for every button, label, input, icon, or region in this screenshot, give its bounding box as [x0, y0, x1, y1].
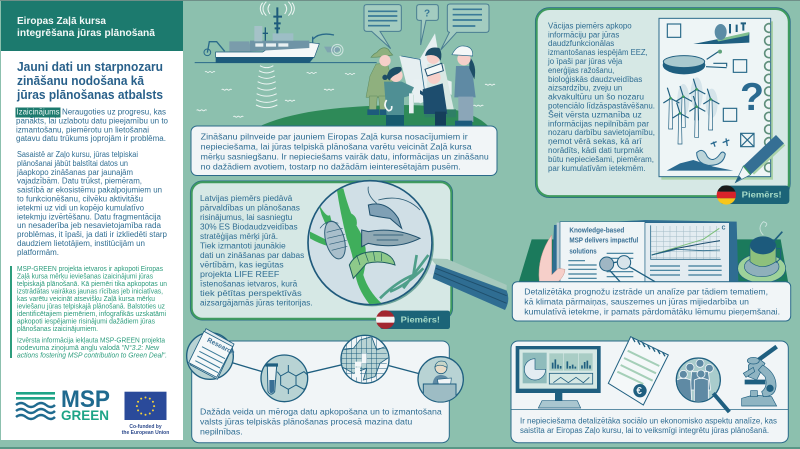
text block: project note: ieviešanu jūras telpiskajā plānošanā. Balstoties uz: [17, 303, 165, 310]
icon: test tube and molecule: [261, 355, 309, 402]
shrimp: [368, 187, 420, 228]
text block: Latvia: [200, 194, 313, 308]
text box: knowledge improvement: nepieciešama, lai jūras telpiskā plānošana varētu veicināt Zaļā kursa: [201, 142, 472, 152]
icon: microscope: [742, 347, 777, 406]
fish: [362, 230, 420, 247]
icon: glasses: [600, 256, 655, 282]
speech bubbles: [364, 4, 489, 50]
text block: Latvia: vērtībām, kas iegūtas: [200, 261, 284, 270]
isopod: [320, 220, 348, 260]
panel: Latvia example: [190, 181, 508, 330]
text box: knowledge improvement: Zināšanu pilnveide par jauniem Eiropas Zaļā kursa nosacījumiem ir: [201, 132, 468, 142]
people with map: [366, 33, 476, 126]
text block: challenge: gatavu datu trūkums joprojām ir problēma.: [16, 134, 166, 143]
badge: Germany example: [716, 185, 789, 205]
text block: project note: identificētajiem piemēriem, infografikās uzskatāmi: [17, 311, 166, 318]
panel: left sidebar: [1, 1, 183, 440]
text block: socio-economic: [520, 416, 777, 435]
icon: hand holding book: [539, 235, 565, 282]
text block: project note: kas varētu veicināt atsevišķu Zaļā kursa mērķu: [17, 296, 155, 303]
text block: Germany: Šeit vērsta uzmanība uz: [548, 110, 642, 119]
text box: forecasting: Detalizētāka prognožu izstrāde un analīze par tādiem tematiem,: [524, 286, 768, 296]
text block: Germany: par kumulatīvām ietekmēm.: [548, 164, 646, 173]
text block: Latvia: Tiek izmantoti jaunākie: [200, 242, 286, 251]
icon: pencil: [735, 135, 785, 183]
text block: challenge: panākts, lai uzlabotu datu pieejamību un to: [16, 116, 169, 125]
illustration: open report on desk: [518, 220, 788, 283]
person: teal jacket: [382, 67, 420, 126]
icon: dashboard monitor: [516, 346, 601, 408]
icon: research paper: Research: [206, 337, 236, 357]
text block: project note: [10, 266, 167, 360]
icon: coast and industry: [693, 23, 749, 44]
heading: [16, 59, 163, 102]
illustration: analysis icons: [516, 337, 777, 412]
text block: green deal data gaps: problēmas, it īpaši, ja dati ir izkliedēti starp: [17, 230, 168, 239]
text block: Germany: akvakultūru un šo nozaru: [548, 93, 644, 102]
header banner: [1, 1, 183, 51]
text block: project note: MSP-GREEN projekta ietvaros ir apkopoti Eiropas: [17, 266, 163, 273]
text block: project note: actions fostering MSP contribution to Green Deal".: [17, 353, 167, 360]
badge: Germany example: Piemērs!: [742, 190, 782, 200]
badge: Latvia example: [375, 310, 450, 330]
text block: green deal data gaps: jāapkopo zināšanas par jaunajām: [16, 168, 133, 177]
book: [552, 220, 738, 283]
text box: knowledge improvement: [191, 126, 497, 176]
research ship: [204, 7, 343, 63]
text box: forecasting: kā klimata pārmaiņas, sauszemes un jūras mijiedarbība un: [524, 296, 749, 306]
text block: green deal data gaps: to funkcionēšanu, cilvēku aktivitāšu: [17, 194, 143, 204]
text block: Germany: norādīts, kādi dati turpmāk: [548, 146, 643, 155]
text box: knowledge improvement: mērķu sasniegšanu. Ir nepieciešams vairāk datu, informācijas un zināšanu: [201, 152, 489, 162]
text block: Germany: [547, 21, 655, 173]
icon: notebook with euro: [608, 337, 668, 405]
text block: project note: Zaļā kursa mērķu ieviešanas izaicinājumi jūras: [17, 273, 153, 280]
text block: green deal data gaps: Sasaistē ar Zaļo kursu, jūras telpiskai: [17, 150, 138, 159]
logo: EU co-funded: [122, 392, 169, 436]
icon: seal on sandbank: [667, 138, 733, 171]
text block: project note: plānošanas izaicinājumiem.: [17, 326, 98, 333]
text block: Latvia: Latvijas piemērs piedāvā: [200, 194, 293, 203]
header banner: Eiropas Zaļā kursa: [17, 16, 106, 27]
text block: green deal data gaps: un nesaderība jeb nesavietojamība rada: [17, 221, 162, 230]
text block: Latvia: projekta LIFE REEF: [200, 270, 279, 279]
text block: project note: Izvērsta informācija iekļauta MSP-GREEN projekta: [17, 338, 165, 345]
text block: Latvia: dati un zināšanas par dabas: [200, 251, 304, 260]
panel: socio-economic analysis: [511, 337, 788, 443]
magnifier handle: [425, 258, 508, 310]
illustration: magnifier over marine life: [308, 181, 508, 330]
text box: knowledge improvement: no dažādiem avotiem, tostarp no dažādām ieinteresētajām pusēm.: [201, 162, 461, 172]
checkboxes: [667, 24, 754, 147]
icon: wind farm: [663, 77, 719, 144]
badge: Latvia example: Piemērs!: [401, 314, 440, 324]
text block: data collection: valsts jūras telpiskās plānošanas procesā mazina datu: [200, 416, 413, 426]
chart: [651, 225, 726, 259]
text block: green deal data gaps: ietekmju izvērtēšanu. Datu fragmentācija: [17, 212, 162, 221]
text box: forecasting: [512, 282, 791, 321]
text block: green deal data gaps: saistībā ar ekosistēmu pakalpojumiem un: [17, 186, 162, 195]
text box: forecasting: kumulatīvā ietekme, ir pamats pārdomātāku lēmumu pieņemšanai.: [524, 306, 780, 316]
text block: challenge: Izaicinājums: [16, 108, 60, 117]
logo: EU co-funded: Co-funded by: [129, 424, 162, 430]
text block: green deal data gaps: daudziem lietotājiem, institūcijām un: [17, 239, 145, 248]
text block: Germany: jo īpaši par jūras vēja: [547, 57, 623, 66]
text block: Latvia: aizsargājamās jūras teritorijas.: [200, 299, 313, 308]
text block: Latvia: stratēģijas mērķi jūrā.: [200, 232, 278, 241]
text block: Germany: aizsardzību, zveju un: [548, 84, 622, 93]
header banner: integrēšana jūras plānošanā: [17, 28, 155, 39]
book: solutions: [569, 246, 597, 255]
icon: question mark: ?: [740, 75, 764, 119]
text block: project note: izstrādātas vairākas jaunas rīcības jeb iniciatīvas,: [17, 288, 163, 295]
speech bubbles: ?: [424, 9, 430, 20]
text block: data collection: [200, 406, 442, 436]
text block: Germany: bioloģiskās daudzveidības: [548, 75, 642, 84]
text block: Germany: ņemot vērā sekas, kā arī: [548, 137, 643, 146]
text block: green deal data gaps: plānošanai jābūt balstītai datos un: [17, 159, 128, 168]
text block: Germany: būtu nepieciešami, piemēram,: [548, 155, 654, 164]
text block: socio-economic: Ir nepieciešama detalizētāka sociālo un ekonomisko aspektu analīze, kas: [520, 416, 777, 426]
text block: project note: apkopoti iespējamie risinājumi dažādiem jūras: [17, 319, 155, 326]
text block: Latvia: tiek pētītas perspektīvās: [200, 289, 302, 298]
person: glasses and white coat: [425, 47, 456, 117]
person: white helmet: [443, 46, 476, 126]
logo: MSP Green: [16, 386, 110, 423]
book: Knowledge-based: [569, 225, 624, 234]
text block: Germany: nozaru darbību savietojamību,: [548, 128, 655, 137]
seaweed: [310, 188, 383, 305]
text block: project note: nodevuma ziņojumā angļu valodā "N°3.2: New: [17, 344, 160, 352]
text block: data collection: Dažāda veida un mēroga datu apkopošana un to izmantošana: [200, 406, 442, 416]
text block: challenge: izmantošanu, piemērotu un lietošanai: [16, 125, 149, 134]
sea line and waves: [195, 63, 495, 117]
logo: MSP Green: MSP: [61, 386, 110, 413]
icon: research paper: [187, 329, 236, 379]
text block: project note: telpiskajā plānošanā. Kā piemēri tika apkopotas un: [17, 281, 167, 288]
person: naval officer: [417, 63, 447, 126]
heading: jūras plānošanas atbalsts: [16, 87, 163, 102]
text block: Germany: informāciju par jūras: [548, 30, 619, 39]
text block: Germany: informācijas nepilnībām par: [548, 119, 649, 128]
chart: C: [722, 225, 726, 231]
icon: aquaculture cage: [663, 50, 727, 74]
icon: person at desk: [418, 357, 463, 406]
logo: EU co-funded: the European Union: [122, 430, 169, 436]
logo: MSP Green: GREEN: [61, 407, 109, 423]
text block: Germany: enerģijas ražošanu,: [548, 66, 614, 75]
text block: challenge: [16, 108, 169, 143]
text block: data collection: nepilnības.: [200, 426, 243, 436]
island: [256, 105, 490, 128]
book: MSP delivers impactful: [569, 236, 638, 245]
icon: coffee cup: [738, 222, 786, 283]
text block: green deal data gaps: vajadzībām. Datu trūkst, piemēram,: [17, 177, 142, 186]
panel: data collection at different scales: [187, 329, 463, 443]
icon: grid map: [341, 335, 390, 383]
teal seaweed: [380, 255, 428, 298]
illustration: survey ship and stakeholders: [195, 2, 495, 126]
text block: Latvia: īstenošanas ietvaros, kurā: [200, 280, 298, 289]
text block: Germany: daudzfunkcionālas: [548, 39, 614, 48]
text block: green deal data gaps: ietekmi uz vidi un kopējo kumulatīvo: [17, 203, 145, 212]
text block: Germany: Vācijas piemērs apkopo: [548, 21, 632, 30]
text block: Germany: potenciālo līdzāspastāvēšanu.: [548, 102, 655, 110]
text block: Latvia: 30% ES Biodaudzveidības: [200, 223, 298, 232]
heading: Jauni dati un starpnozaru: [17, 59, 163, 74]
icon: magnifier over people: [676, 358, 729, 412]
panel: Germany example: [535, 8, 790, 205]
text block: socio-economic: saistīta ar Eiropas Zaļo kursu, lai to veiksmīgi integrētu jūras plānošanā.: [520, 426, 769, 435]
person: green hat: [366, 48, 394, 115]
text block: Latvia: pārvaldības un plānošanas: [200, 204, 300, 213]
heading: zināšanu nodošana kā: [17, 73, 145, 88]
text block: Germany: izmantošanas iespējām EEZ,: [548, 48, 648, 57]
text block: Latvia: risinājumus, lai sasniegtu: [200, 213, 292, 222]
text block: challenge: Neraugoties uz progresu, kas: [62, 108, 166, 117]
icon: notebook with euro: €: [636, 386, 642, 397]
text block: green deal data gaps: [16, 150, 168, 257]
icon: radio signal: [260, 2, 294, 16]
text block: green deal data gaps: platformām.: [17, 248, 59, 257]
amphipod: [349, 251, 395, 278]
illustration: notebook checklist: [659, 18, 789, 205]
illustration: data icons linked: [187, 329, 463, 406]
spiral binding: [765, 24, 771, 172]
